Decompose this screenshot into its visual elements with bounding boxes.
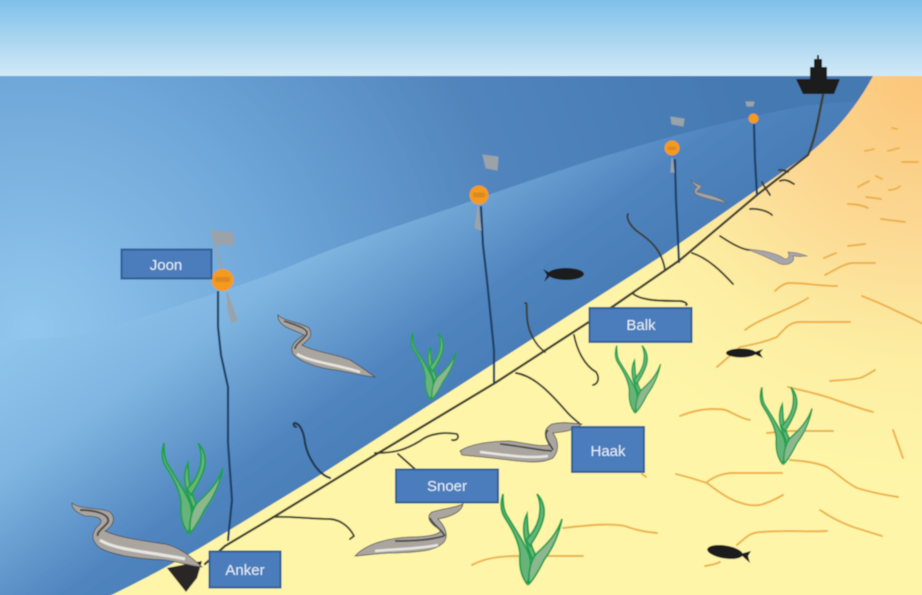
label: Haak [572,427,644,472]
eel: by hook [460,423,582,462]
hook line in water [294,423,330,478]
label: Haak: Haak [590,443,626,460]
sky [0,0,922,77]
buoy rope lines [218,125,757,540]
label: Anker [210,552,280,588]
label: Snoer [396,470,498,502]
eel: below snoer [355,504,463,556]
sand seabed [80,76,922,595]
ship [796,55,840,94]
eel: small upper [691,180,727,203]
eel: small on sand [747,249,807,265]
buoys [212,114,758,291]
plant: sand right [760,387,812,464]
label: Snoer: Snoer [427,478,467,495]
plant: water left [162,443,223,533]
eel: middle water [278,315,375,377]
label: Balk [590,308,692,342]
fish: sand upper [726,348,763,358]
plant: sand bottom [501,494,562,584]
eel: bottom left [72,503,202,567]
flags [211,102,754,323]
plant: sand upper [615,346,661,412]
orange sand ripples [472,128,922,566]
label: Joon: Joon [150,257,182,274]
label: Balk: Balk [626,317,656,334]
fish: sand lower [706,543,751,563]
plant: water middle [411,333,457,399]
fish: water [543,268,584,282]
label: Joon [122,250,212,278]
label: Anker: Anker [225,562,265,579]
anchor [167,561,202,592]
long line with branch lines and hooks [205,95,823,564]
